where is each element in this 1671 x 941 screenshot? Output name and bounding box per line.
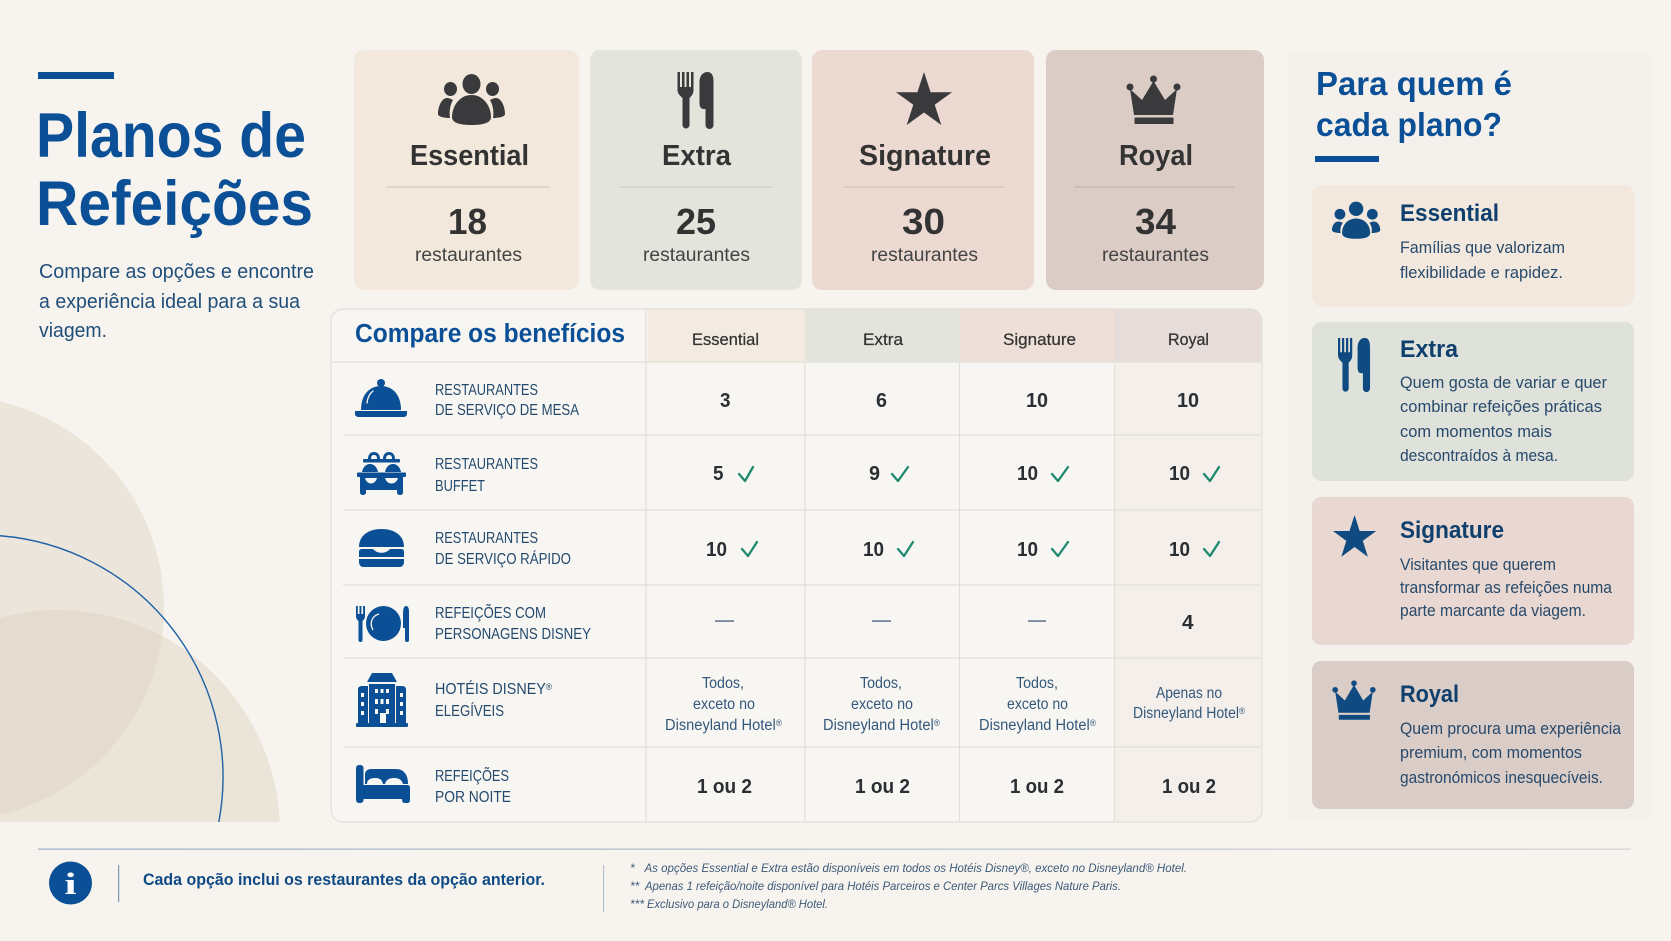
card: Extra: Extra: [1400, 336, 1459, 363]
card: Essential: Essential: [1400, 200, 1499, 227]
row: quick service: 10: [1169, 539, 1190, 561]
row: meals per night: POR NOITE: [435, 789, 511, 806]
icon: info: [49, 862, 92, 904]
row: character meals: REFEIÇÕES COM: [435, 605, 546, 622]
title: Refeições: [36, 169, 313, 239]
icon: hotel: [356, 673, 408, 727]
footnotes: As opções Essential e Extra estão disponíveis em todos os Hotéis Disney®, exceto no Disneyland® Hotel.: [644, 861, 1187, 875]
card: Essential: [1312, 185, 1634, 306]
panel: plan card Extra: restaurantes: [643, 245, 750, 266]
icon: info: i: [64, 866, 77, 901]
card: Royal: gastronómicos inesquecíveis.: [1400, 768, 1603, 787]
row: quick service: 10: [863, 539, 884, 561]
row: meals per night: 1 ou 2: [697, 776, 752, 798]
row: meals per night: 1 ou 2: [1010, 776, 1064, 798]
intro text: viagem.: [39, 319, 107, 342]
card: Essential: flexibilidade e rapidez.: [1400, 263, 1563, 282]
row: eligible hotels: Disneyland Hotel: [979, 717, 1096, 734]
icon: plate with cutlery: [356, 606, 409, 642]
row: eligible hotels: exceto no: [693, 696, 755, 713]
row: meals per night: 1 ou 2: [1162, 776, 1216, 798]
card: Signature: parte marcante da viagem.: [1400, 601, 1586, 620]
icon: star: [1333, 515, 1376, 557]
panel: plan card Essential: Essential: [410, 140, 529, 172]
card: Royal: [1312, 661, 1634, 809]
row: quick service: 10: [1017, 539, 1038, 561]
row: character meals: [356, 605, 1194, 643]
row: eligible hotels: Disneyland Hotel: [1133, 705, 1250, 722]
row: eligible hotels: ELEGÍVEIS: [435, 703, 504, 720]
footnotes: ***: [630, 897, 644, 911]
card: Essential: Famílias que valorizam: [1400, 238, 1565, 257]
row: buffet: [357, 452, 1219, 495]
row: meals per night: REFEIÇÕES: [435, 768, 509, 785]
row: buffet: BUFFET: [435, 478, 485, 495]
panel heading: cada plano?: [1316, 106, 1502, 143]
icon: burger: [359, 529, 404, 567]
icon: people: [438, 74, 505, 125]
row: meals per night: [356, 765, 1216, 806]
panel: plan card Essential: restaurantes: [415, 245, 522, 266]
card: Signature: transformar as refeições numa: [1400, 578, 1612, 597]
icon: crown: [1126, 76, 1180, 124]
intro text: a experiência ideal para a sua: [39, 290, 301, 313]
panel heading: Para quem é: [1316, 65, 1512, 102]
table column headers: Essential: [692, 330, 759, 349]
table heading: Compare os benefícios: [355, 320, 625, 348]
row: table service: [355, 379, 1199, 419]
panel: plan card Signature: 30: [902, 201, 945, 242]
panel: plan card Extra: [590, 50, 802, 290]
card: Extra: com momentos mais: [1400, 422, 1552, 441]
icon: fork and knife: [678, 72, 714, 129]
row: buffet: RESTAURANTES: [435, 456, 538, 473]
row: eligible hotels: Todos,: [1016, 675, 1058, 692]
card: Royal: Royal: [1400, 681, 1459, 708]
table column headers: Royal: [1168, 330, 1209, 349]
icon: star: [896, 72, 952, 125]
footer note: Cada opção inclui os restaurantes da opção anterior.: [143, 870, 545, 889]
panel: plan card Royal: 34: [1135, 201, 1176, 242]
panel: plan card Essential: [354, 50, 579, 290]
row: eligible hotels: ®: [776, 718, 782, 728]
row: quick service: RESTAURANTES: [435, 530, 538, 547]
row: eligible hotels: Todos,: [860, 675, 902, 692]
row: eligible hotels: [356, 673, 1245, 734]
row: eligible hotels: HOTÉIS DISNEY: [435, 681, 555, 698]
card: Extra: descontraídos à mesa.: [1400, 446, 1558, 465]
intro text: Compare as opções e encontre: [39, 260, 314, 283]
row: table service: RESTAURANTES: [435, 382, 538, 399]
row: eligible hotels: ®: [1090, 718, 1096, 728]
card: Signature: [1312, 497, 1634, 645]
card: Extra: Quem gosta de variar e quer: [1400, 373, 1607, 392]
row: buffet: 9: [869, 463, 880, 485]
card: Royal: premium, com momentos: [1400, 743, 1582, 762]
card: Signature: Visitantes que querem: [1400, 555, 1556, 574]
title block: [36, 72, 313, 239]
icon: fork and knife: [1338, 338, 1370, 392]
row: table service: 3: [720, 390, 730, 412]
row: buffet: 5: [713, 463, 724, 485]
table column headers: Extra: [863, 330, 904, 349]
title: Planos de: [36, 101, 306, 171]
icon: buffet: [357, 452, 406, 495]
row: eligible hotels: Disneyland Hotel: [823, 717, 940, 734]
row: quick service: [359, 529, 1219, 568]
panel: plan card Royal: restaurantes: [1102, 245, 1209, 266]
footnotes: [630, 861, 1187, 911]
icon: people: [1332, 202, 1380, 239]
icon: cloche: [355, 379, 407, 417]
row: eligible hotels: ®: [546, 682, 552, 692]
footnotes: **: [630, 879, 640, 893]
row: eligible hotels: Disneyland Hotel: [665, 717, 782, 734]
card: Royal: Quem procura uma experiência: [1400, 719, 1621, 738]
panel: plan card Signature: [812, 50, 1034, 290]
footer rule: [38, 848, 1631, 850]
card: Extra: [1312, 322, 1634, 481]
row: buffet: 10: [1017, 463, 1038, 485]
row: character meals: PERSONAGENS DISNEY: [435, 626, 591, 643]
row: eligible hotels: exceto no: [851, 696, 913, 713]
row: eligible hotels: Todos,: [702, 675, 744, 692]
row: eligible hotels: Apenas no: [1156, 685, 1222, 702]
panel: plan card Essential: 18: [448, 201, 487, 242]
row: eligible hotels: ®: [934, 718, 940, 728]
row: character meals: 4: [1182, 612, 1194, 634]
row: table service: 6: [876, 390, 887, 412]
row: table service: 10: [1177, 390, 1199, 412]
panel: who each plan is for: [1287, 50, 1652, 822]
panel: plan card Extra: Extra: [662, 140, 732, 172]
decorative circles: [0, 402, 280, 822]
panel: plan card Extra: 25: [676, 201, 716, 242]
panel: plan card Royal: Royal: [1119, 140, 1193, 172]
row: eligible hotels: ®: [1239, 706, 1245, 716]
icon: bed: [356, 765, 410, 803]
row: table service: 10: [1026, 390, 1048, 412]
table column headers: Signature: [1003, 330, 1076, 349]
row: buffet: 10: [1169, 463, 1190, 485]
row: quick service: 10: [706, 539, 727, 561]
row: table service: DE SERVIÇO DE MESA: [435, 402, 580, 419]
panel: plan card Royal: [1046, 50, 1264, 290]
row: quick service: DE SERVIÇO RÁPIDO: [435, 551, 571, 568]
panel: plan card Signature: restaurantes: [871, 245, 978, 266]
row: meals per night: 1 ou 2: [855, 776, 910, 798]
row: eligible hotels: exceto no: [1007, 696, 1068, 713]
icon: crown: [1332, 680, 1376, 720]
card: Extra: combinar refeições práticas: [1400, 397, 1602, 416]
card: Signature: Signature: [1400, 517, 1504, 544]
panel: plan card Signature: Signature: [859, 140, 991, 172]
footnotes: *: [630, 861, 635, 875]
table column headers: [692, 330, 1209, 349]
footnotes: Apenas 1 refeição/noite disponível para Hotéis Parceiros e Center Parcs Villages Nature Paris.: [644, 879, 1121, 893]
footnotes: Exclusivo para o Disneyland® Hotel.: [647, 897, 828, 911]
comparison table: [331, 309, 1262, 822]
